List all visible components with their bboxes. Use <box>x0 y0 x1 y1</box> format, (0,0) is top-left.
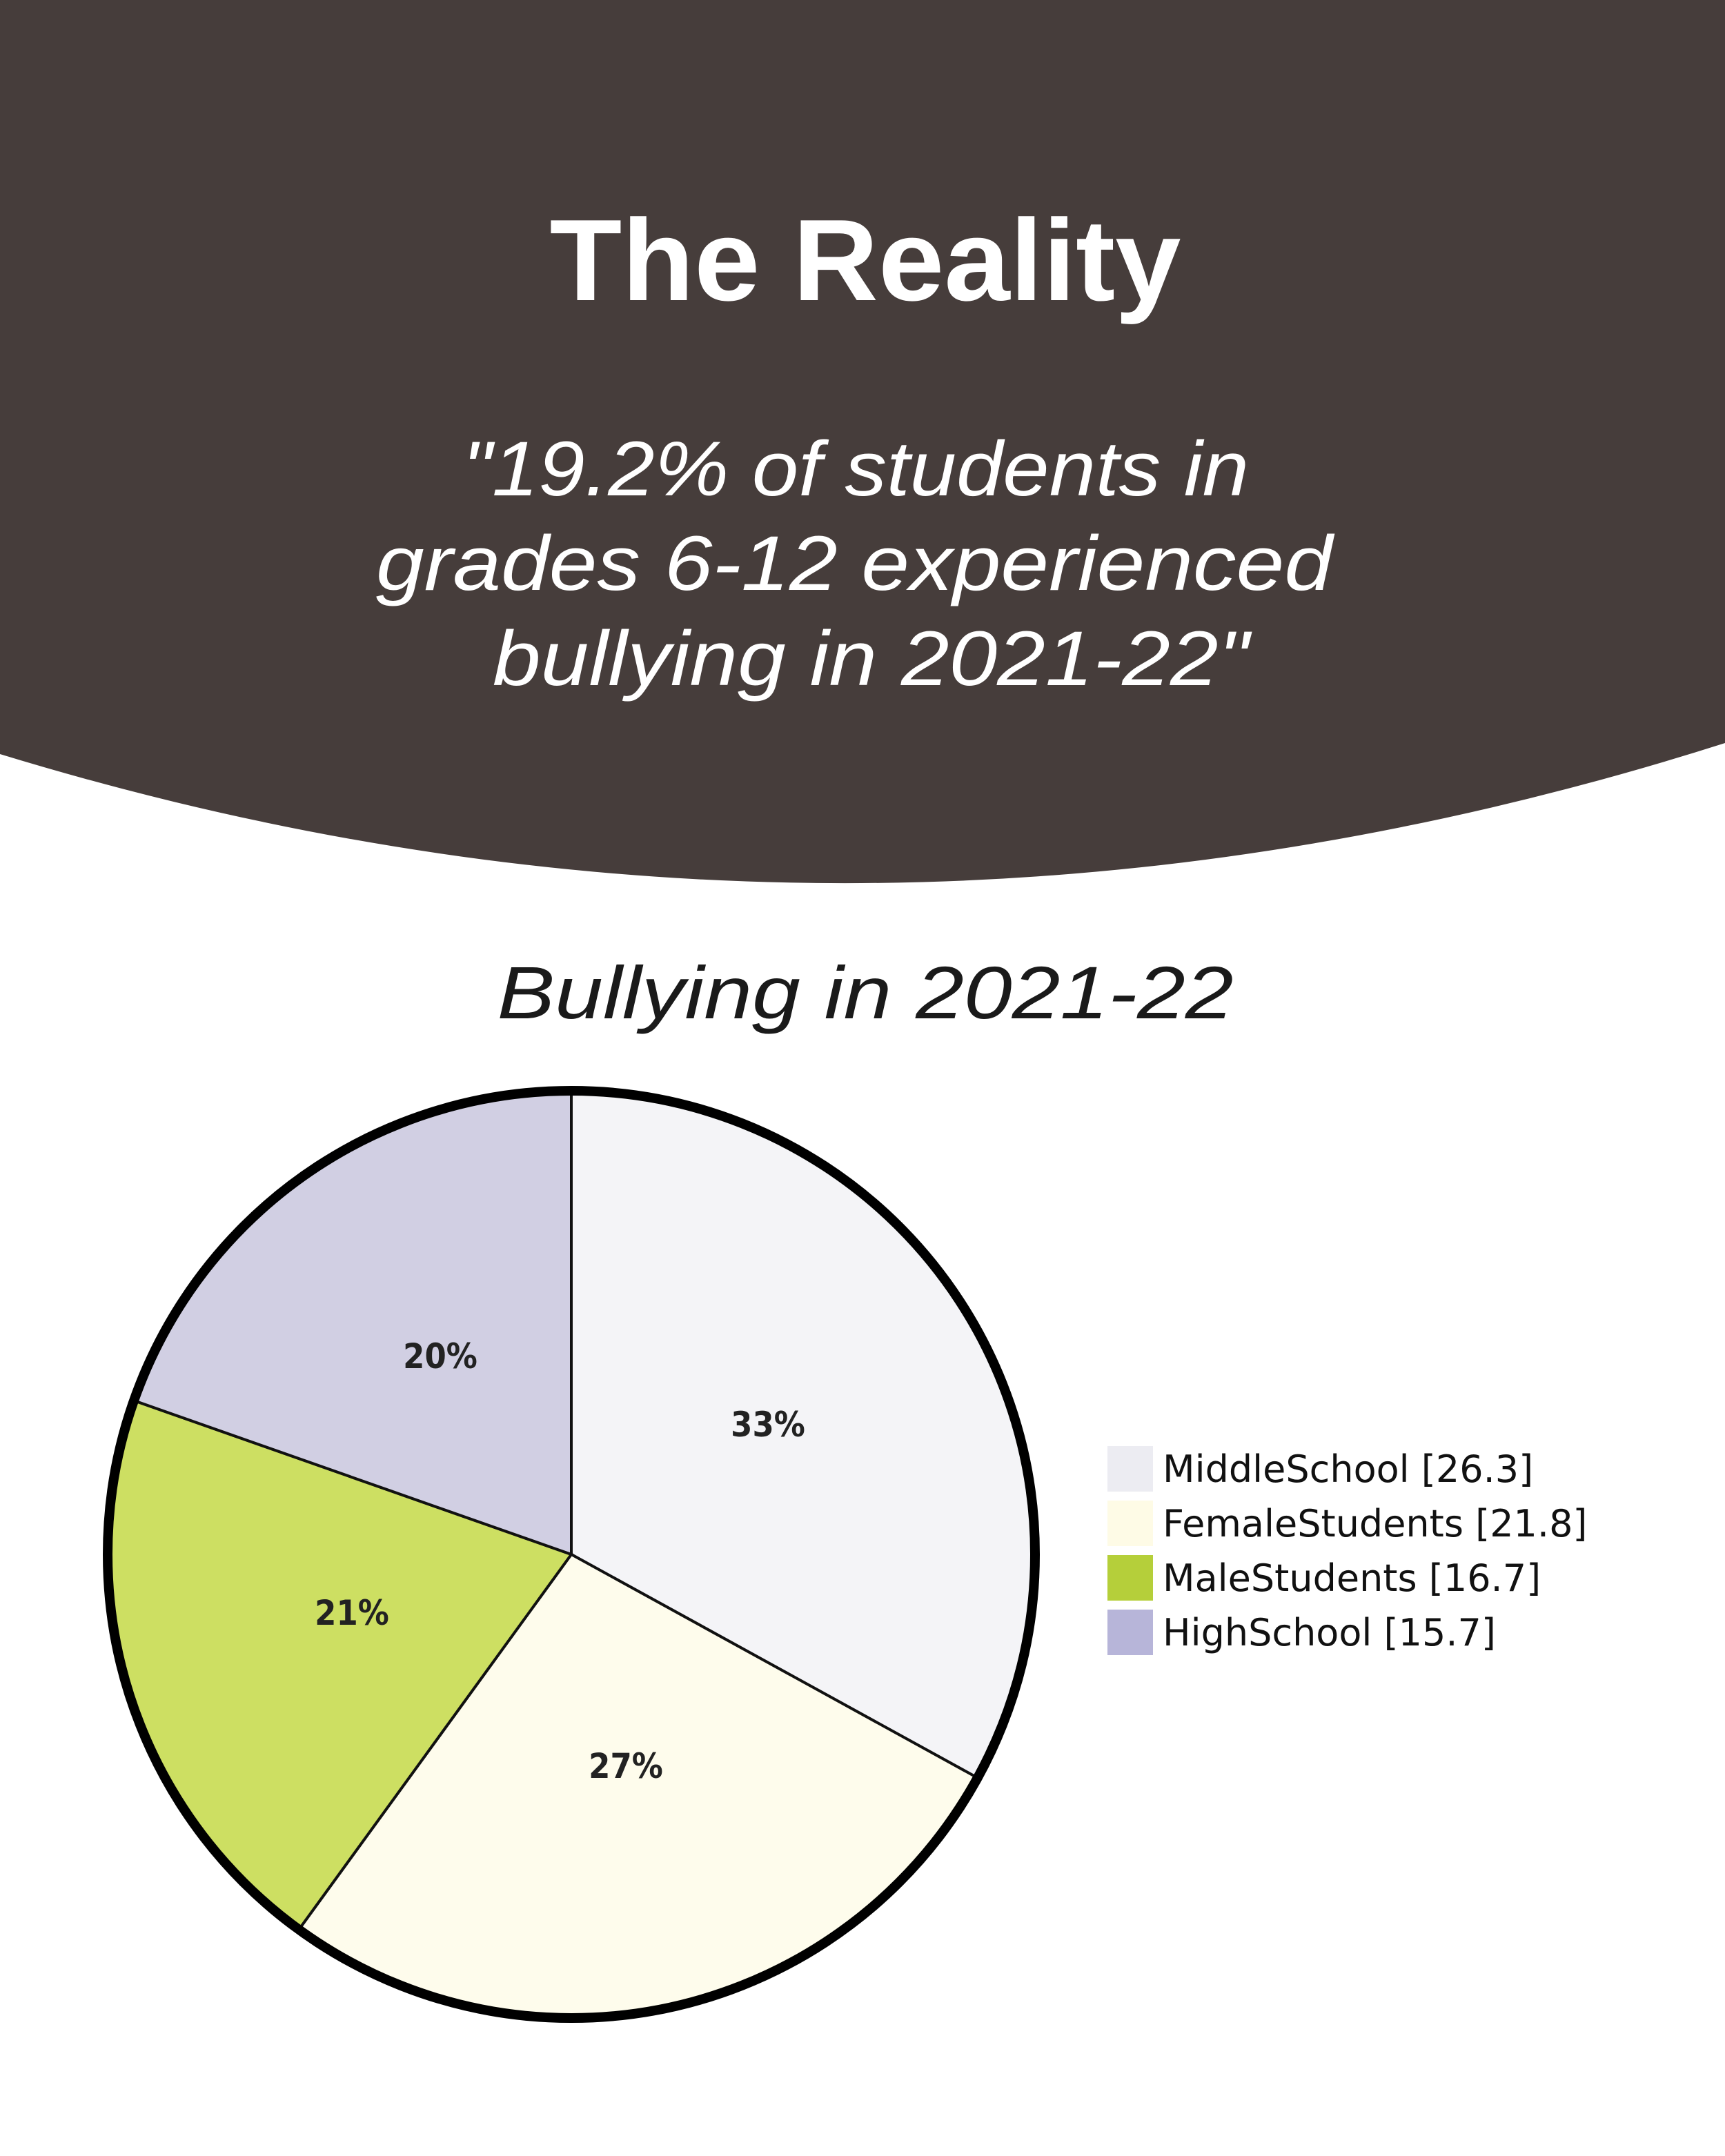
legend: MaleStudents [16.7] <box>1163 1556 1541 1600</box>
slice: middle school 33% <box>571 1091 1035 1778</box>
quote text: grades 6-12 experienced <box>376 520 1335 606</box>
pie labels: 21% <box>315 1593 389 1633</box>
header: dark curved banner <box>0 0 1725 883</box>
quote text <box>376 426 1335 702</box>
slice: high school 20% <box>134 1091 571 1554</box>
title: The Reality <box>549 195 1181 325</box>
chart title: Bullying in 2021-22 <box>497 951 1234 1034</box>
pie labels: 33% <box>731 1405 805 1445</box>
slice: male students 21% <box>108 1401 571 1930</box>
legend: HighSchool [15.7] <box>1163 1611 1496 1654</box>
pie labels: 27% <box>589 1746 663 1786</box>
slice: female students 27% <box>299 1554 978 2018</box>
pie labels: 20% <box>403 1336 477 1376</box>
pie chart <box>108 1091 1035 2018</box>
legend: FemaleStudents [21.8] <box>1163 1502 1587 1545</box>
quote text: "19.2% of students in <box>462 426 1249 512</box>
legend <box>1107 1446 1587 1655</box>
legend: MiddleSchool [26.3] <box>1163 1447 1533 1491</box>
pie labels <box>315 1336 805 1786</box>
quote text: bullying in 2021-22" <box>493 615 1252 702</box>
